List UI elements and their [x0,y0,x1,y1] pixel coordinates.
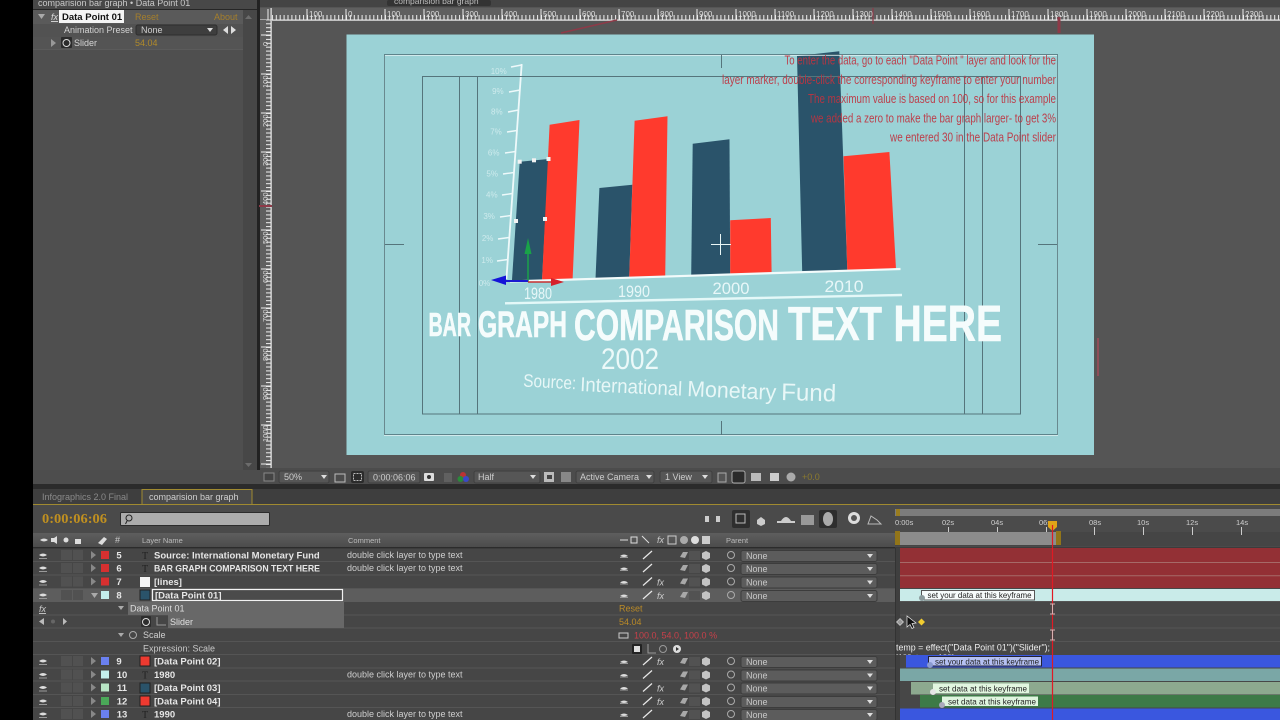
layer row 7 [39,576,877,588]
effect sub row: fx [39,604,47,614]
slider sub row: Slider [170,617,193,627]
layer selection handles [514,157,550,223]
annotation text: we entered 30 in the Data Point slider [889,130,1057,144]
data point 04 bar: set data at this keyframe [948,696,1036,706]
panel divider [33,484,1280,489]
horizontal ruler: 300 [465,10,479,19]
tab bar: comparision bar graph [149,492,239,502]
3D axis gizmo [491,238,564,286]
horizontal ruler [260,8,1280,21]
source line: Fund [781,379,837,407]
timeline time ruler: 06s [1039,518,1051,527]
horizontal ruler: 900 [699,10,713,19]
comp canvas [346,34,1094,455]
layer row 5: double click layer to type text [347,550,463,560]
scale sub row: Scale [143,630,166,640]
title-safe guides [384,54,1058,436]
horizontal ruler: 100 [387,10,401,19]
layer row 11: 11 [117,683,128,694]
expression sub row: Expression: Scale [143,644,215,654]
annotation text: we added a zero to make the bar graph larger- to get 3% [810,110,1056,126]
expression text: [100, temp, 100] [896,653,954,662]
layer column header: Parent [726,536,749,545]
y axis labels: 3% [483,212,495,221]
horizontal ruler: 1500 [933,10,951,19]
chart base line [510,269,900,282]
viewer toolbar: 50% [284,472,302,482]
timeline time ruler: 0:00s [895,518,914,527]
x axis year labels: 1990 [618,282,650,301]
layer row 7: [lines] [154,577,182,588]
y axis labels: 0% [479,279,490,288]
layer row 5: T [142,551,148,562]
keyframes [896,618,925,626]
I-beam markers [1050,604,1055,640]
viewer toolbar: +0.0 [802,472,820,482]
layer row 11: fx [657,684,665,694]
bars 1980 [512,120,580,281]
heading: HERE [894,295,1002,352]
panel: composition viewer [259,0,1280,484]
layer row 12: [Data Point 04] [154,696,221,708]
layer row 10: T [142,670,148,682]
layer row 9: fx [657,657,665,667]
horizontal ruler: 100 [309,10,323,19]
timeline time ruler [33,509,1280,548]
bars 2000 [691,139,772,276]
layer row 13: None [746,710,768,720]
horizontal ruler: 400 [504,10,518,19]
horizontal ruler: 1700 [1011,10,1029,19]
effect header row: Data Point 01 [62,12,123,23]
annotation text: The maximum value is based on 100, so for this example [808,91,1056,106]
data point 01 bar: set your data at this keyframe [928,590,1032,600]
y axis labels: 7% [490,128,502,136]
layer column header: # [115,535,120,545]
y axis labels: 9% [492,87,504,96]
vertical ruler: 0 [261,42,270,46]
y axis labels: 1% [481,256,493,265]
centre crosshair [711,234,731,255]
heading: TEXT [788,297,882,350]
slider sub row: 54.04 [619,617,642,627]
vertical ruler: 700 [261,309,270,322]
bars 2010 [797,51,896,272]
data point 04 bar [920,695,1280,708]
annotation text: layer marker, double-click the corresponding keyframe to enter your number [722,72,1057,87]
viewer toolbar: Active Camera [580,472,639,482]
layer row 13: double click layer to type text [347,709,463,719]
bars 1990 [596,116,668,279]
red motion path artefacts [259,8,1098,376]
effect header row [38,10,238,23]
horizontal ruler: 1800 [1050,10,1068,19]
layer row 10 [39,670,877,682]
horizontal ruler: 2000 [1128,10,1146,19]
layer row 6: BAR GRAPH COMPARISON TEXT HERE [154,564,320,574]
layer row 12: fx [657,697,665,707]
y axis labels: 6% [488,148,499,158]
layer row 5 [39,550,877,562]
vertical ruler: 400 [261,192,270,205]
layer row 6: double click layer to type text [347,563,463,573]
slider row: Slider [74,38,97,48]
horizontal ruler: 800 [660,10,674,19]
layer row 5: Source: International Monetary Fund [154,550,320,562]
heading: BAR [428,306,471,343]
vertical ruler: 200 [261,114,270,127]
layer row 13 [39,709,877,720]
mouse cursor [907,616,916,628]
layer column header: Comment [348,536,381,545]
horizontal ruler: 1100 [777,10,795,19]
layer row 8 selected: [Data Point 01] [155,590,222,602]
y axis labels: 8% [491,108,503,116]
1990 text layer bar [900,708,1280,720]
horizontal ruler: 500 [543,10,557,19]
data point 03 bar [911,682,1280,695]
y axis [497,64,522,279]
data point 02 bar [906,655,1280,668]
tab bar: Infographics 2.0 Final [42,492,128,502]
horizontal ruler: 1300 [855,10,873,19]
layer column header [33,533,895,548]
timeline time ruler: 10s [1137,518,1149,527]
layer row 6: None [746,564,768,574]
1980 text layer bar [900,668,1280,681]
animation preset row: Animation Preset [64,25,133,35]
horizontal ruler: 1900 [1089,10,1107,19]
x axis year labels: 1980 [524,284,552,303]
timecode: 0:00:06:06 [42,511,107,526]
layer row 11: [Data Point 03] [154,683,221,694]
black side bar [0,0,33,720]
effect header row: About [214,12,238,22]
y axis labels: 4% [486,190,498,200]
effect sub row: Data Point 01 [130,604,185,614]
layer row 6: 6 [116,564,122,574]
horizontal ruler: 200 [426,10,440,19]
x axis year labels [524,277,864,303]
timeline time ruler: 14s [1236,518,1248,527]
layer row 7: fx [657,578,665,588]
timeline layer bars [895,525,1280,720]
vertical ruler: 900 [261,387,270,400]
bar chart [479,51,902,303]
second rule [505,295,902,303]
vertical ruler: 600 [261,270,270,283]
vertical ruler: 500 [261,231,270,244]
tab bar [33,489,1280,505]
layer row 5: 5 [116,550,122,562]
scroll bar [243,10,257,470]
heading [428,295,1002,352]
effect header row: fx [51,12,59,22]
panel: timeline [33,489,1280,720]
year subheading: 2002 [601,343,659,376]
expression text: temp = effect("Data Point 01")("Slider"); [896,642,1050,654]
horizontal ruler: 1000 [738,10,756,19]
horizontal ruler: 1600 [972,10,990,19]
timeline time ruler: 12s [1186,518,1198,527]
search box [120,512,270,526]
layer row 7: 7 [116,577,122,588]
slider sub row [39,615,642,628]
slider row [51,37,158,48]
layer row 6 [39,563,877,575]
vertical ruler: 1000 [261,425,270,442]
panel: effect controls [33,0,260,470]
layer row 5: None [746,551,768,561]
source line: Monetary [687,376,777,405]
layer row 8 selected: fx [657,591,665,601]
vertical ruler: 800 [261,348,270,361]
layer row 6: T [142,564,148,575]
layer row 11 [39,682,877,694]
layer column header: fx [657,535,665,545]
viewer toolbar: 0:00:06:06 [373,472,416,482]
layer row 9: None [746,657,768,667]
layer row 10: 10 [117,670,127,681]
vertical ruler: 100 [261,75,270,88]
layer column header: Layer Name [142,536,183,545]
layer row 12: 12 [117,696,127,708]
layer row 12 [39,696,877,708]
y axis labels: 10% [491,67,507,76]
layer row 8 selected: None [746,591,768,601]
layer rows [33,549,895,720]
layer row 8 selected: 8 [116,590,122,602]
annotation text: To enter the data, go to each "Data Point " layer and look for the [784,52,1056,68]
y axis labels: 2% [482,234,493,243]
horizontal ruler: 600 [582,10,596,19]
animation preset row [64,25,236,35]
effect sub row [39,602,643,615]
layer row 12: None [746,697,768,707]
horizontal ruler: 0 [348,10,353,19]
timeline time ruler: 04s [991,518,1003,527]
timeline time ruler: 08s [1089,518,1101,527]
source line: Source: [523,371,577,393]
layer row 11: None [746,684,768,694]
layer row 9: [Data Point 02] [154,656,221,668]
expression sub row [143,644,681,654]
horizontal ruler: 2100 [1167,10,1185,19]
x axis year labels: 2000 [712,279,750,298]
red layer bars [900,548,1280,588]
vertical ruler: 300 [261,153,270,166]
y axis labels [479,67,507,288]
horizontal ruler: 2300 [1245,10,1263,19]
animation preset row: None [141,25,163,35]
source line: International [580,374,683,401]
layer row 7: None [746,578,768,588]
viewer toolbar: 1 View [665,472,692,482]
data point 01 bar [900,589,1280,601]
vertical ruler [260,8,272,470]
effect sub row: Reset [619,604,643,614]
layer row 10: double click layer to type text [347,670,463,680]
timeline time ruler: 02s [942,518,954,527]
annotation text [722,52,1057,144]
scale sub row [118,630,717,640]
effect header row: Reset [135,12,159,22]
current time indicator [1052,525,1054,720]
viewer toolbar: Half [478,472,495,482]
layer row 8 selected [39,590,877,602]
source line [523,371,837,407]
slider row: 54.04 [135,38,158,48]
timeline toolbar icons [705,510,881,528]
scale sub row: 100.0, 54.0, 100.0 % [634,630,717,640]
layer row 9: 9 [116,656,122,668]
data point 03 bar: set data at this keyframe [939,684,1027,694]
heading: COMPARISON [574,301,779,350]
x axis year labels: 2010 [824,277,864,296]
layer row 10: 1980 [154,670,175,681]
y axis labels: 5% [486,170,498,178]
horizontal ruler: 1200 [816,10,834,19]
horizontal ruler: 1400 [894,10,912,19]
data point 02 bar: set your data at this keyframe [935,656,1039,666]
horizontal ruler: 2200 [1206,10,1224,19]
layer row 9 [39,656,877,668]
viewer toolbar [260,468,1280,484]
heading: GRAPH [478,304,567,345]
horizontal ruler: 700 [621,10,635,19]
layer row 10: None [746,670,768,680]
